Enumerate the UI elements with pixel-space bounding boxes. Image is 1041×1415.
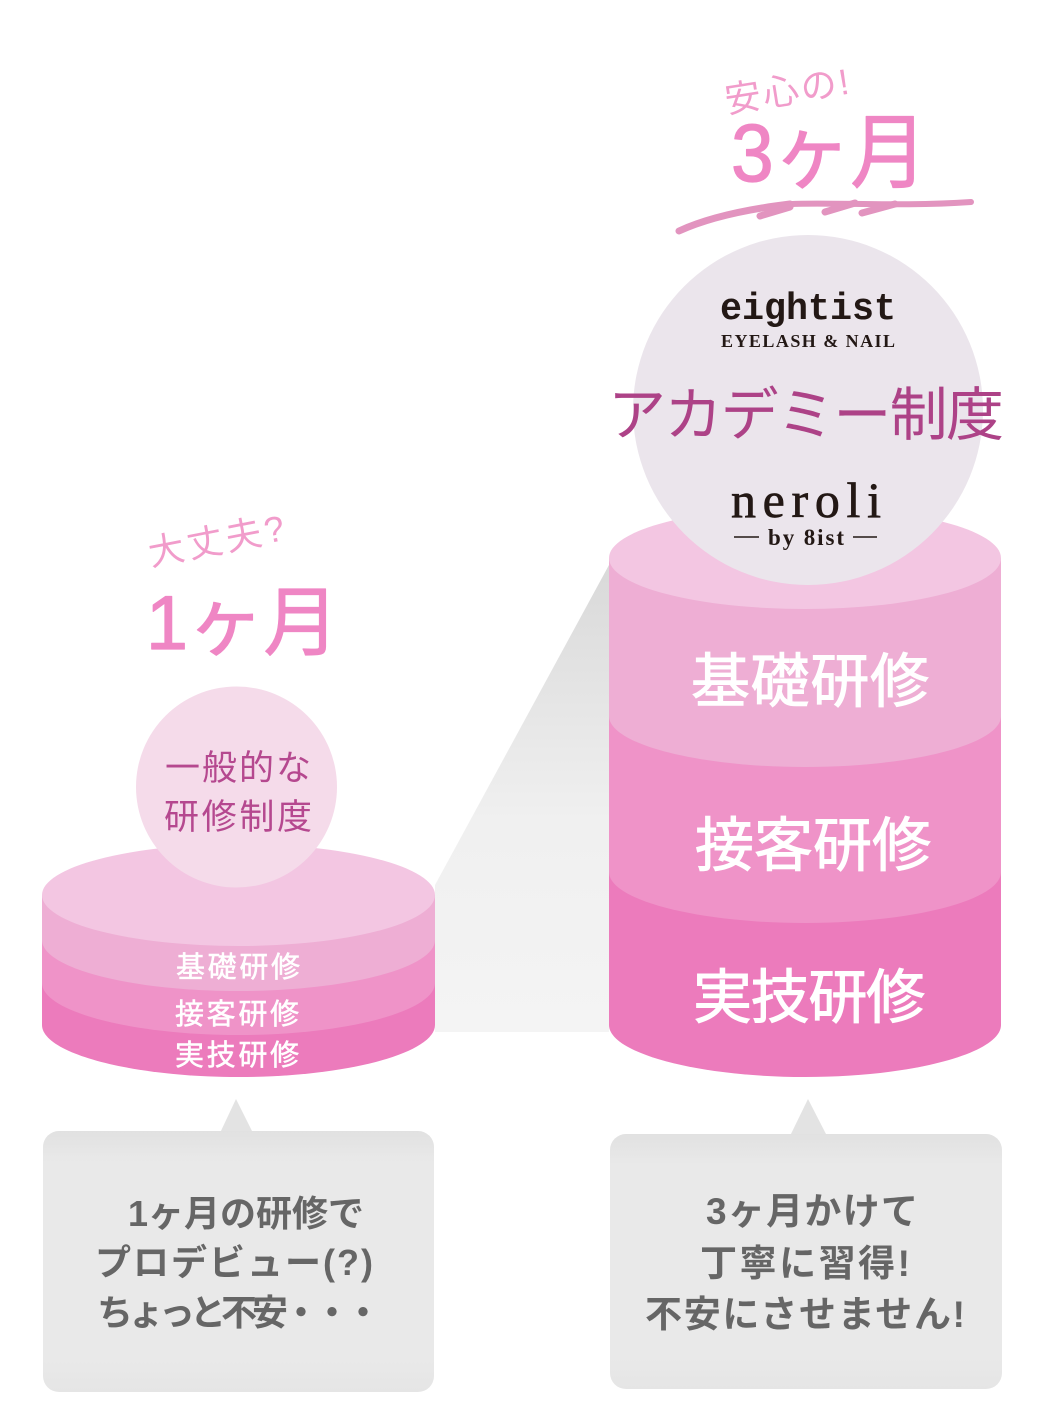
right heading [679, 61, 971, 231]
connector wedge [435, 565, 609, 1032]
left speech bubble [43, 1099, 434, 1392]
left duration: 1ヶ月 [146, 581, 339, 666]
left tagline: 大丈夫? [145, 507, 288, 574]
left circle text line 2: 研修制度 [164, 798, 312, 837]
left bubble text: ちょっと不安・・・ [97, 1292, 381, 1333]
neroli subtitle: by 8ist [768, 525, 844, 550]
brush underline [679, 202, 971, 231]
left cylinder [42, 844, 435, 1077]
right bubble text: 丁寧に習得! [700, 1243, 910, 1284]
left bubble text: プロデビュー(?) [95, 1242, 373, 1283]
left heading [145, 507, 339, 666]
neroli dashes [734, 536, 877, 538]
right cylinder [609, 507, 1001, 1077]
right bubble text [645, 1191, 965, 1335]
right tagline: 安心の! [722, 61, 852, 121]
left layer label: basics: 基礎研修 [176, 951, 300, 984]
right layer label: practical: 実技研修 [693, 965, 925, 1031]
right bubble text: 不安にさせません! [645, 1294, 965, 1335]
right bubble text: 3ヶ月かけて [706, 1191, 918, 1232]
right circle: academy system [608, 235, 1004, 585]
left bubble text: 1ヶ月の研修で [128, 1193, 364, 1234]
left layer label: service: 接客研修 [175, 998, 299, 1031]
eightist subtitle: EYELASH & NAIL [721, 331, 895, 351]
right layer label: service: 接客研修 [695, 813, 931, 879]
neroli logo: neroli [731, 472, 881, 528]
right duration: 3ヶ月 [731, 108, 927, 199]
left circle text line 1: 一般的な [165, 749, 311, 788]
academy title: アカデミー制度 [608, 383, 1004, 448]
left layer label: practical: 実技研修 [175, 1039, 299, 1072]
left bubble text [95, 1193, 381, 1333]
right layer label: basics: 基礎研修 [691, 649, 929, 715]
left circle: general training system [136, 686, 337, 888]
eightist logo: eightist [720, 288, 896, 331]
right speech bubble [610, 1099, 1002, 1389]
